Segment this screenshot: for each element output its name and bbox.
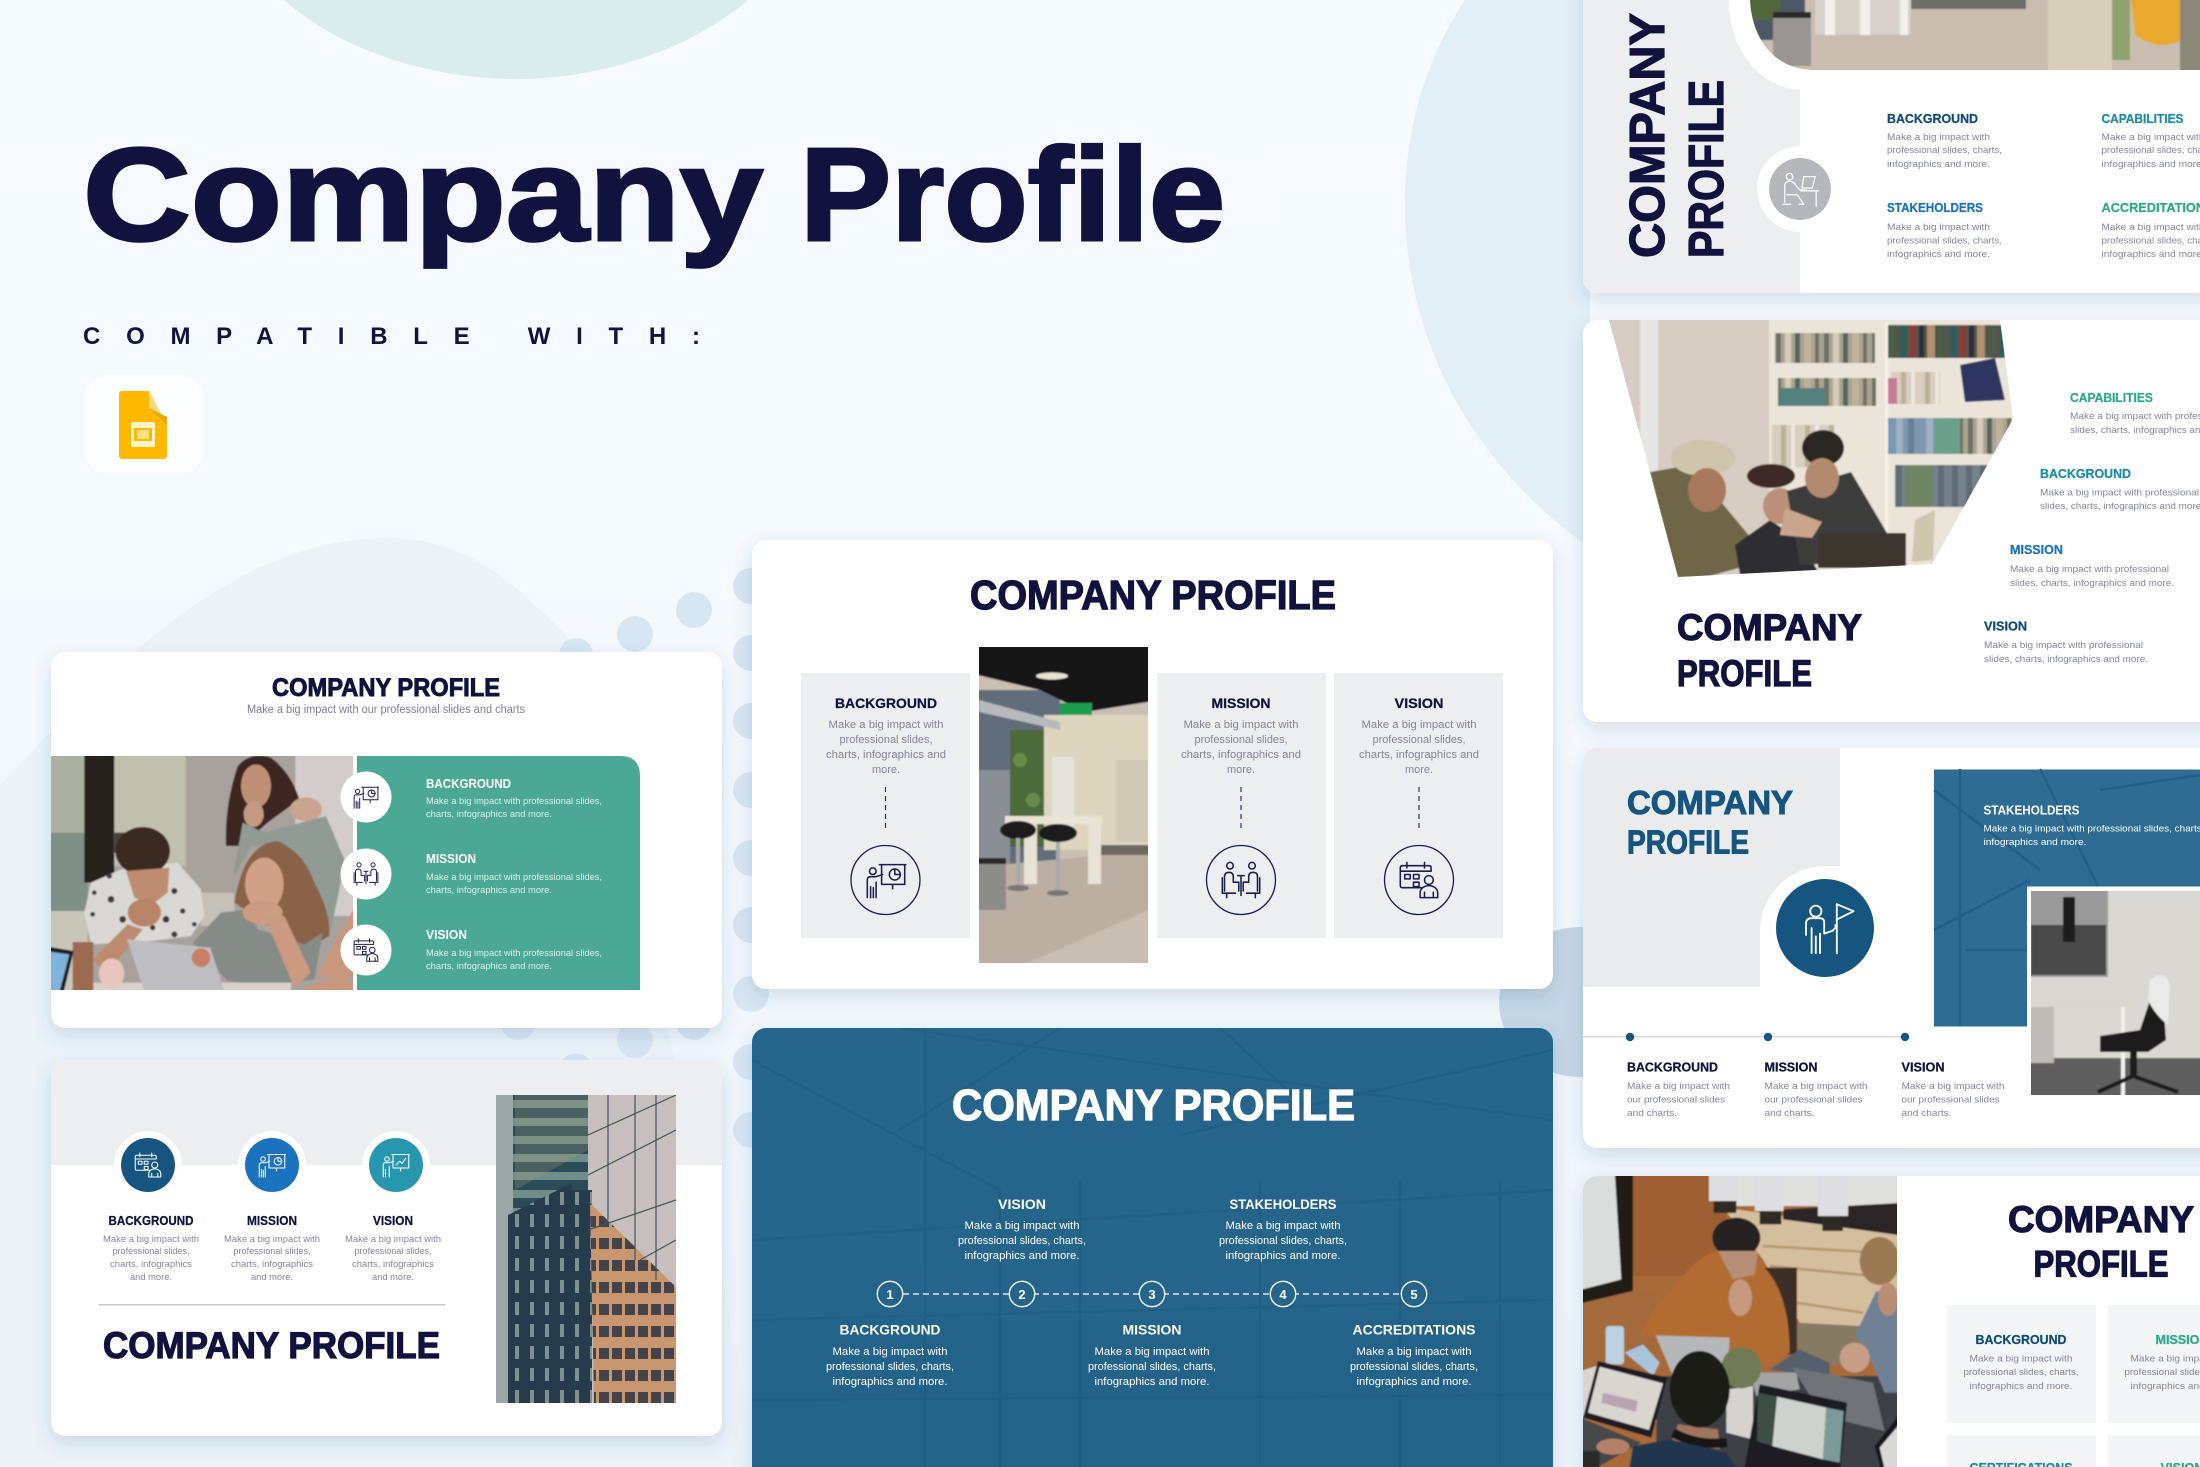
text: vision: charts, infographics xyxy=(352,1259,434,1270)
text: stakeholders: Make a big impact with xyxy=(1887,222,1990,233)
text: background: charts, infographics xyxy=(110,1259,192,1270)
photo: team with laptops xyxy=(1576,1169,1910,1467)
heading: COMPANY xyxy=(2008,1199,2194,1240)
blue stakeholders box: STAKEHOLDERS xyxy=(1984,804,2080,818)
text: vision xyxy=(1984,620,2148,665)
text: accreditations: infographics and more. xyxy=(1356,1376,1472,1388)
icon: google slides xyxy=(85,375,203,474)
text: capabilities xyxy=(2070,391,2200,436)
column: mission: Make a big impact with xyxy=(1184,719,1298,731)
text: background xyxy=(2040,467,2200,512)
panel: slide with flag icon xyxy=(1583,748,2200,1148)
text: mission: and more. xyxy=(251,1272,293,1283)
heading xyxy=(1677,607,1862,694)
timeline: 3 xyxy=(1148,1287,1156,1302)
text: mission: charts, infographics xyxy=(231,1259,313,1270)
text: vision: VISION xyxy=(998,1196,1046,1212)
text: vision: professional slides, charts, xyxy=(958,1235,1086,1247)
text: vision: charts, infographics and more. xyxy=(426,961,552,972)
text: background: slides, charts, infographics and more. xyxy=(2040,501,2200,512)
column: background: more. xyxy=(872,764,900,776)
photo: desk and chair xyxy=(2027,886,2200,1095)
grey sidebar xyxy=(1583,0,1805,293)
icon: vision circle xyxy=(362,1131,430,1199)
text: background: BACKGROUND xyxy=(108,1214,194,1228)
icon: background xyxy=(340,772,392,822)
text: background: infographics and more. xyxy=(1887,159,1990,170)
box: mission xyxy=(2108,1305,2200,1423)
text: mission xyxy=(2010,543,2174,589)
column: mission: professional slides, xyxy=(1194,734,1288,746)
text: capabilities: infographics and more. xyxy=(2102,159,2200,170)
text: vision: slides, charts, infographics and more. xyxy=(1984,654,2148,665)
text: background: BACKGROUND xyxy=(840,1322,940,1338)
text: mission: and charts. xyxy=(1764,1108,1814,1119)
text: stakeholders: Make a big impact with xyxy=(1226,1220,1340,1232)
text: vision: Make a big impact with xyxy=(1902,1081,2004,1092)
text: capabilities: Make a big impact with xyxy=(2102,132,2200,143)
text: stakeholders: infographics and more. xyxy=(1887,249,1990,260)
heading: COMPANY xyxy=(1627,784,1793,821)
icon: background circle xyxy=(114,1131,182,1199)
text: mission: Make a big impact with xyxy=(1094,1346,1210,1358)
column: background: Make a big impact with xyxy=(828,719,944,731)
text: stakeholders xyxy=(1887,201,2002,260)
text: vision xyxy=(426,928,602,972)
text: mission: MISSION xyxy=(1764,1060,1818,1074)
icon: mission circle xyxy=(238,1131,306,1199)
heading: vertical: COMPANY xyxy=(1621,13,1675,258)
heading: PROFILE xyxy=(1627,824,1749,860)
icon: mission xyxy=(340,848,392,900)
background blob: lower left xyxy=(0,538,760,1467)
text: background: professional slides, xyxy=(112,1246,190,1257)
column: vision xyxy=(1334,673,1503,938)
text: vision: our professional slides xyxy=(1902,1094,2000,1106)
text: mission: MISSION xyxy=(1122,1322,1182,1338)
column: vision: VISION xyxy=(1394,695,1444,711)
photo overlay: hall structure xyxy=(752,1028,1553,1467)
blue stakeholders box xyxy=(1934,769,2200,1026)
text: accreditations xyxy=(2102,201,2200,260)
text: vision: Make a big impact with xyxy=(964,1220,1080,1232)
column: background: BACKGROUND xyxy=(835,695,937,711)
title xyxy=(83,121,1225,268)
title: Company xyxy=(83,121,763,268)
text: background: BACKGROUND xyxy=(1627,1060,1718,1074)
text: accreditations: infographics and more. xyxy=(2102,249,2200,260)
box: vision xyxy=(2108,1435,2200,1467)
heading: PROFILE xyxy=(2034,1244,2168,1284)
column: background: professional slides, xyxy=(840,734,932,746)
heading: vertical: PROFILE xyxy=(1680,80,1734,258)
text: mission: MISSION xyxy=(426,852,476,866)
text: background: BACKGROUND xyxy=(1887,112,1978,126)
blue stakeholders box: infographics and more. xyxy=(1984,837,2086,848)
text: mission: charts, infographics and more. xyxy=(426,885,552,896)
text: background: BACKGROUND xyxy=(426,777,511,791)
text: accreditations xyxy=(1350,1322,1478,1388)
column: vision: professional slides, xyxy=(1372,734,1466,746)
column: background: charts, infographics and xyxy=(826,749,946,761)
text: mission xyxy=(1764,1060,1868,1119)
text: stakeholders: professional slides, charts, xyxy=(1887,236,2002,246)
text: vision: infographics and more. xyxy=(964,1250,1080,1262)
text: background: infographics and more. xyxy=(832,1376,948,1388)
heading: COMPANY xyxy=(1677,607,1862,648)
photo: library team xyxy=(1609,320,2013,577)
text: accreditations: ACCREDITATIONS xyxy=(1352,1322,1476,1338)
text: background: professional slides, charts, xyxy=(826,1361,954,1373)
text: mission: Make a big impact with xyxy=(224,1234,320,1245)
panel: slide vertical title xyxy=(1583,0,2200,293)
photo: team at laptop xyxy=(51,756,353,990)
text: capabilities: CAPABILITIES xyxy=(2102,112,2184,126)
text: mission: slides, charts, infographics and more. xyxy=(2010,578,2174,589)
text: background xyxy=(1887,112,2002,170)
text: background: and charts. xyxy=(1627,1108,1677,1119)
text: vision: Make a big impact with xyxy=(345,1234,441,1245)
text: background: Make a big impact with xyxy=(1627,1081,1730,1092)
text: mission xyxy=(426,852,602,896)
icon: desk worker xyxy=(1757,146,1843,232)
text: background xyxy=(426,777,602,820)
panel: slide teal overview xyxy=(44,652,722,1028)
text: vision: VISION xyxy=(426,928,467,942)
text: vision: VISION xyxy=(1902,1060,1944,1074)
text: mission: Make a big impact with professional slides, xyxy=(426,872,602,883)
text: vision xyxy=(1902,1060,2004,1119)
heading: COMPANY PROFILE xyxy=(970,572,1336,618)
text: stakeholders xyxy=(1219,1196,1347,1262)
heading: COMPANY PROFILE xyxy=(952,1081,1355,1130)
icon: vision xyxy=(340,924,392,976)
timeline: 2 xyxy=(1018,1287,1026,1302)
text: vision: VISION xyxy=(1984,620,2027,634)
background blob: lower centre xyxy=(1499,927,1661,1077)
title: Profile xyxy=(800,121,1225,268)
subtitle: compatible with: COMPATIBLE WITH: xyxy=(83,323,700,350)
text: background xyxy=(103,1214,199,1283)
column: vision: Make a big impact with xyxy=(1362,719,1476,731)
timeline: 5 xyxy=(1410,1287,1418,1302)
column: mission: more. xyxy=(1227,764,1255,776)
panel: slide with team photo xyxy=(1576,1169,2200,1467)
column: background xyxy=(801,673,970,938)
text: accreditations: professional slides, charts, xyxy=(1350,1361,1478,1373)
box: background: BACKGROUND xyxy=(1976,1333,2066,1347)
subheading: Make a big impact with our professional slides and charts xyxy=(247,704,525,716)
text: vision: professional slides, xyxy=(354,1246,432,1257)
heading xyxy=(1627,784,1793,860)
heading: COMPANY PROFILE xyxy=(103,1325,440,1366)
photo: building xyxy=(496,1095,676,1403)
heading: vertical xyxy=(1621,13,1734,258)
text: mission: Make a big impact with professional xyxy=(2010,564,2169,575)
text: background: our professional slides xyxy=(1627,1094,1725,1106)
box: background: professional slides, charts, xyxy=(1964,1367,2078,1378)
text: background: Make a big impact with professional slides, xyxy=(426,796,602,807)
photo: office interior xyxy=(979,647,1148,963)
text: background: Make a big impact with xyxy=(832,1346,948,1358)
text: vision xyxy=(345,1214,441,1283)
text: mission: professional slides, xyxy=(234,1246,310,1257)
box: certifications xyxy=(1946,1435,2096,1467)
teal panel xyxy=(357,756,640,990)
text: mission: infographics and more. xyxy=(1094,1376,1210,1388)
grey block xyxy=(1583,748,1840,987)
photo: office strip xyxy=(1750,0,2200,70)
text: accreditations: Make a big impact with xyxy=(2102,222,2200,233)
text: vision xyxy=(958,1196,1086,1262)
text: background: Make a big impact with xyxy=(1887,132,1990,143)
timeline xyxy=(1583,1033,1909,1041)
box: background xyxy=(1946,1305,2096,1423)
column: vision: charts, infographics and xyxy=(1359,749,1479,761)
text: vision: VISION xyxy=(373,1214,413,1228)
panel: slide library xyxy=(1583,310,2200,722)
text: vision: Make a big impact with professional xyxy=(1984,640,2143,651)
panel: blue timeline slide xyxy=(752,1028,1553,1467)
background dot grid xyxy=(500,568,769,1148)
background blob: top teal xyxy=(284,0,748,79)
timeline: 1 xyxy=(886,1287,894,1302)
text: stakeholders: infographics and more. xyxy=(1226,1250,1340,1262)
icon: flag xyxy=(1776,879,1874,977)
text: accreditations: Make a big impact with xyxy=(1356,1346,1472,1358)
text: mission: Make a big impact with xyxy=(1764,1081,1868,1092)
timeline xyxy=(877,1281,1427,1307)
panel: slide with office xyxy=(752,540,1553,989)
text: mission: professional slides, charts, xyxy=(1088,1361,1216,1373)
column: vision: more. xyxy=(1405,764,1433,776)
text: stakeholders: STAKEHOLDERS xyxy=(1887,201,1983,215)
box: background: Make a big impact with xyxy=(1970,1354,2072,1364)
box: background: infographics and more. xyxy=(1970,1381,2072,1392)
column: mission: MISSION xyxy=(1212,695,1270,711)
text: mission: MISSION xyxy=(247,1214,297,1228)
column: mission xyxy=(1157,673,1326,938)
grey band xyxy=(51,1060,722,1165)
text: vision: and more. xyxy=(372,1272,414,1283)
column: mission: charts, infographics and xyxy=(1181,749,1301,761)
text: background: professional slides, charts, xyxy=(1887,145,2002,156)
heading: PROFILE xyxy=(1677,653,1812,694)
text: background xyxy=(1627,1060,1730,1119)
text: background: Make a big impact with professional xyxy=(2040,488,2199,498)
text: background: BACKGROUND xyxy=(2040,467,2131,481)
text: mission xyxy=(224,1214,320,1283)
text: capabilities xyxy=(2102,112,2200,170)
blue stakeholders box: Make a big impact with professional slides, charts, xyxy=(1984,824,2200,834)
heading xyxy=(2008,1199,2194,1284)
panel: slide with building xyxy=(51,1060,722,1436)
background blob: right xyxy=(1405,0,1590,548)
text: mission xyxy=(1088,1322,1216,1388)
timeline: 4 xyxy=(1279,1287,1287,1302)
text: vision: Make a big impact with professional slides, xyxy=(426,948,602,959)
text: vision: and charts. xyxy=(1902,1108,1952,1119)
text: background xyxy=(826,1322,954,1388)
heading: COMPANY PROFILE xyxy=(272,674,500,702)
text: background: and more. xyxy=(130,1272,172,1283)
text: stakeholders: professional slides, charts, xyxy=(1219,1235,1347,1247)
text: stakeholders: STAKEHOLDERS xyxy=(1230,1196,1336,1212)
text: mission: MISSION xyxy=(2010,543,2063,557)
text: mission: our professional slides xyxy=(1764,1094,1863,1106)
text: background: charts, infographics and more. xyxy=(426,809,552,820)
text: capabilities: CAPABILITIES xyxy=(2070,391,2153,405)
text: background: Make a big impact with xyxy=(103,1234,199,1245)
